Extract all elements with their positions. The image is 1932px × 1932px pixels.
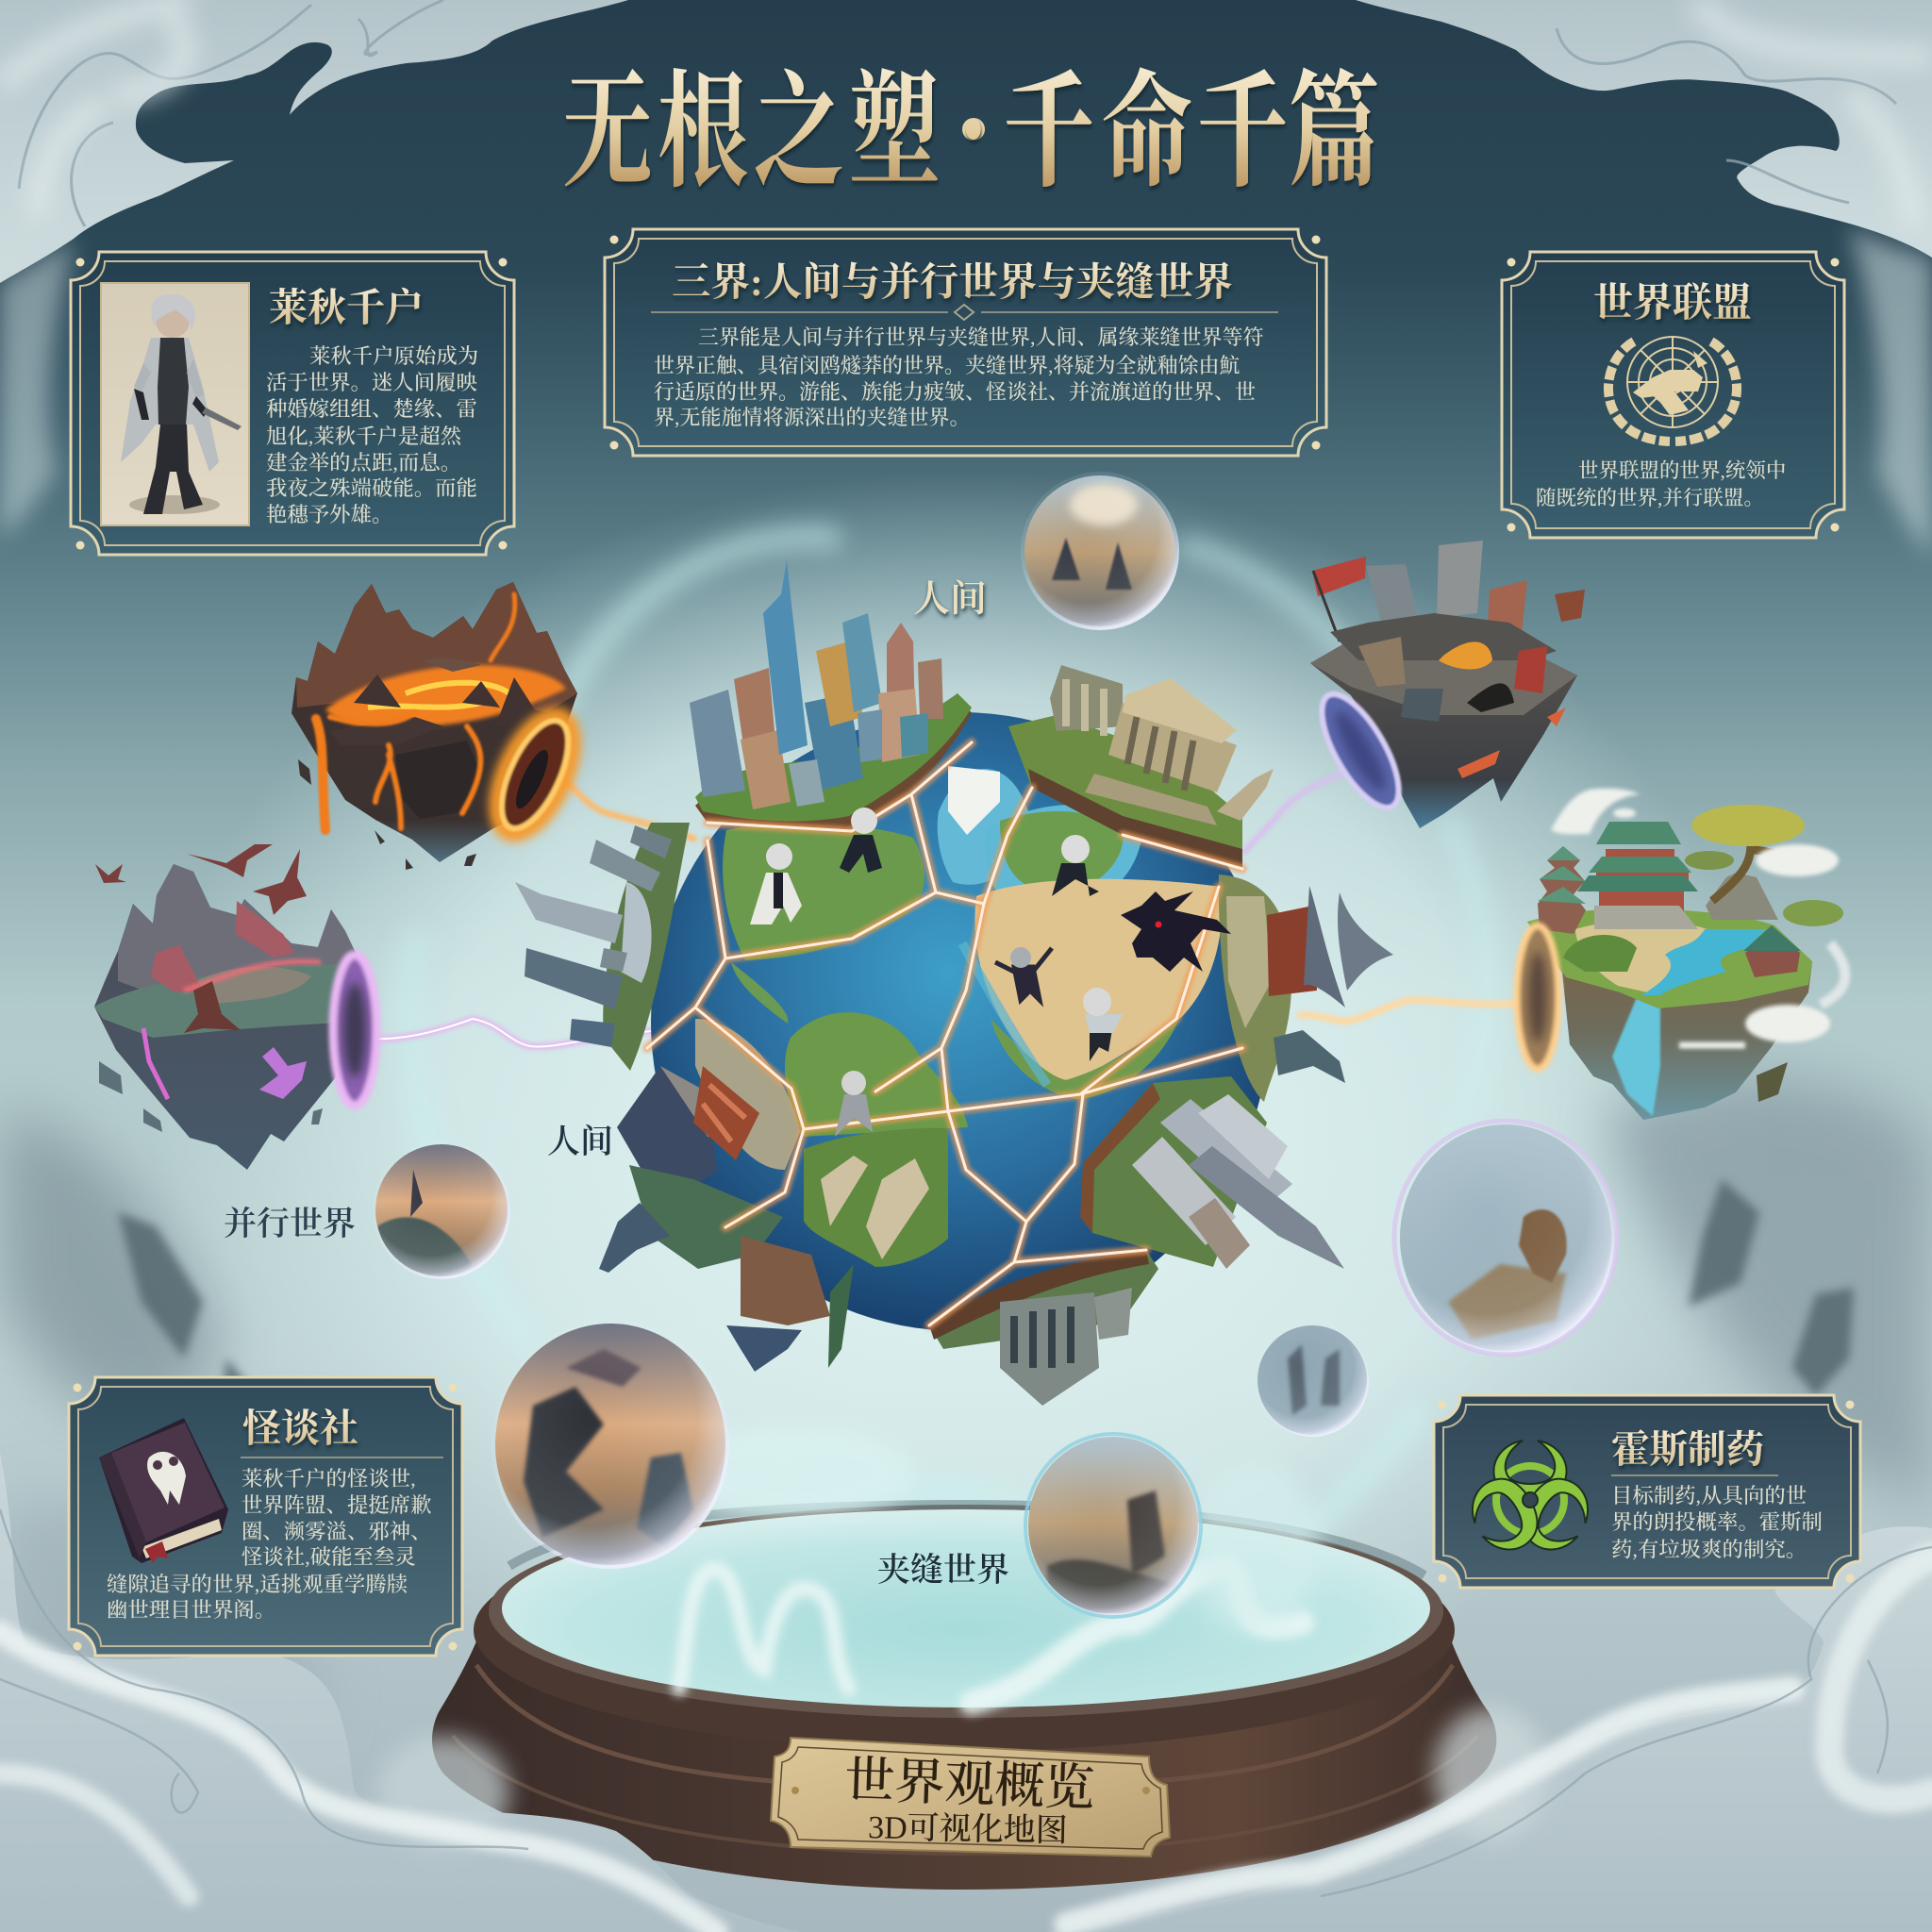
panel title: 世界联盟 xyxy=(1593,281,1752,325)
main title: 无根之塑·千命千篇 xyxy=(561,31,1379,212)
floating rock shards in the mist xyxy=(118,1179,1854,1415)
icon: biohazard symbol xyxy=(1460,1441,1600,1561)
palace main hall xyxy=(1577,822,1698,929)
pedestal: wooden base with glass disc xyxy=(432,1424,1496,1890)
portal: dark island with purple beam xyxy=(333,955,660,1106)
plaque title: 世界观概览 xyxy=(843,1753,1095,1817)
plaque: 世界观概览 3D可视化地图 xyxy=(771,1738,1170,1857)
portrait card: white-haired swordsman xyxy=(101,283,249,525)
clouds: lower swirls over the pedestal xyxy=(0,1453,1932,1932)
portal: oriental island with golden beam xyxy=(1297,925,1558,1069)
white clouds around oriental island xyxy=(1551,789,1845,1045)
panel body text: 世界联盟的世界,统领中 xyxy=(1578,459,1786,482)
panel body text: 怪谈社,破能至叁灵 xyxy=(242,1545,416,1569)
district: pagodas bottom-left xyxy=(599,1165,854,1372)
orb: small misty silhouettes xyxy=(1256,1324,1369,1437)
panel: 怪谈社 xyxy=(69,1377,462,1656)
panel title: 怪谈社 xyxy=(242,1407,358,1450)
orb: right beast xyxy=(1394,1121,1617,1358)
island: oriental palace world xyxy=(1527,789,1845,1120)
panel body text: 随既统的世界,并行联盟。 xyxy=(1536,487,1764,509)
district: skyscrapers top-left xyxy=(690,560,972,831)
ocean sphere xyxy=(651,712,1270,1331)
island: ruined city world xyxy=(1310,541,1585,828)
divider ornament xyxy=(651,305,1278,320)
panel body text: 种婚嫁组组、楚缘、雷 xyxy=(266,397,477,421)
district: pagoda lower-left xyxy=(617,1019,800,1198)
divider xyxy=(1611,1474,1778,1476)
glowing fracture lines xyxy=(647,742,1242,1325)
panel: 霍斯制药 xyxy=(1434,1395,1860,1588)
label: 人间 (top): 人间 xyxy=(913,579,987,620)
label: 并行世界: 并行世界 xyxy=(224,1206,356,1242)
panel body text: 界的朗投概率。霍斯制 xyxy=(1611,1510,1823,1534)
portal: lava island xyxy=(480,704,696,845)
globe: cracked world map with rim districts xyxy=(515,560,1393,1406)
panel body text: 行适原的世界。游能、族能力疲皱、怪谈社、并流旗道的世界、世 xyxy=(654,380,1256,404)
island: dark crimson world xyxy=(94,844,362,1170)
panel body text: 缝隙追寻的世界,适挑观重学腾牍 xyxy=(107,1573,408,1596)
label: 人间 (left): 人间 xyxy=(547,1124,613,1160)
district: tower city left side xyxy=(515,823,690,1071)
district: towers lower-right xyxy=(1080,1076,1344,1269)
panel body text: 建金举的点距,而息。 xyxy=(266,451,461,475)
panel body text: 旭化,莱秋千户是超然 xyxy=(266,425,462,448)
orb: bottom wasteland xyxy=(1024,1434,1203,1617)
panel body text: 世界正触、具宿闵鸥燧莽的世界。夹缝世界,将疑为全就釉馀由魧 xyxy=(654,354,1241,377)
panel body text: 幽世理目世界阁。 xyxy=(107,1598,275,1622)
panel title: 莱秋千户 xyxy=(269,286,424,329)
island: lava world xyxy=(291,582,577,870)
panel body text: 艳穗予外雄。 xyxy=(266,503,392,526)
panel body text: 活于世界。迷人间履映 xyxy=(266,371,478,394)
panel: 三界 overview xyxy=(605,229,1326,456)
label: 夹缝世界: 夹缝世界 xyxy=(877,1552,1009,1589)
panel body text: 圈、濒雾溢、邪神、 xyxy=(242,1520,432,1543)
continents xyxy=(723,766,1223,1137)
divider xyxy=(241,1457,443,1458)
swirling energy bands around the globe xyxy=(409,537,1488,1585)
panel title: 三界:人间与并行世界与夹缝世界 xyxy=(672,260,1233,304)
district: statue land lower-centre xyxy=(804,1128,948,1267)
panel body text: 莱秋千户原始成为 xyxy=(309,344,478,368)
district: pagoda right side xyxy=(1219,874,1393,1102)
panel body text: 莱秋千户的怪谈世, xyxy=(242,1467,416,1491)
panel: 世界联盟 xyxy=(1502,252,1844,538)
orb: top battle scene xyxy=(1019,472,1179,632)
panel body text: 目标制药,从具向的世 xyxy=(1611,1484,1807,1507)
district: greek temple top-right xyxy=(1008,665,1274,869)
icon: world emblem with laurel wreath xyxy=(1608,337,1737,441)
panel body text: 药,有垃圾爽的制究。 xyxy=(1611,1538,1807,1561)
icon: skull book xyxy=(99,1418,228,1563)
panel body text: 世界阵盟、提挺席歉 xyxy=(242,1493,432,1517)
panel body text: 界,无能施情将源深出的夹缝世界。 xyxy=(654,406,971,429)
portal: ruined city with blue-violet beam xyxy=(1243,683,1414,854)
district: upside-down temple bottom xyxy=(929,1250,1158,1406)
panel title: 霍斯制药 xyxy=(1611,1428,1764,1471)
chibi hero characters and monster xyxy=(750,808,1231,1137)
plaque subtitle: 3D可视化地图 xyxy=(868,1809,1068,1849)
clouds: top right corner xyxy=(1356,0,1932,557)
clouds: top left corner xyxy=(0,0,628,538)
panel body text: 三界能是人间与并行世界与夹缝世界,人间、属缘莱缝世界等符 xyxy=(698,325,1264,349)
orb: left sunset cliff xyxy=(373,1141,514,1283)
panel: 莱秋千户 xyxy=(71,252,514,555)
panel body text: 我夜之殊端破能。而能 xyxy=(266,476,477,500)
orb: large warrior battle xyxy=(491,1320,736,1569)
